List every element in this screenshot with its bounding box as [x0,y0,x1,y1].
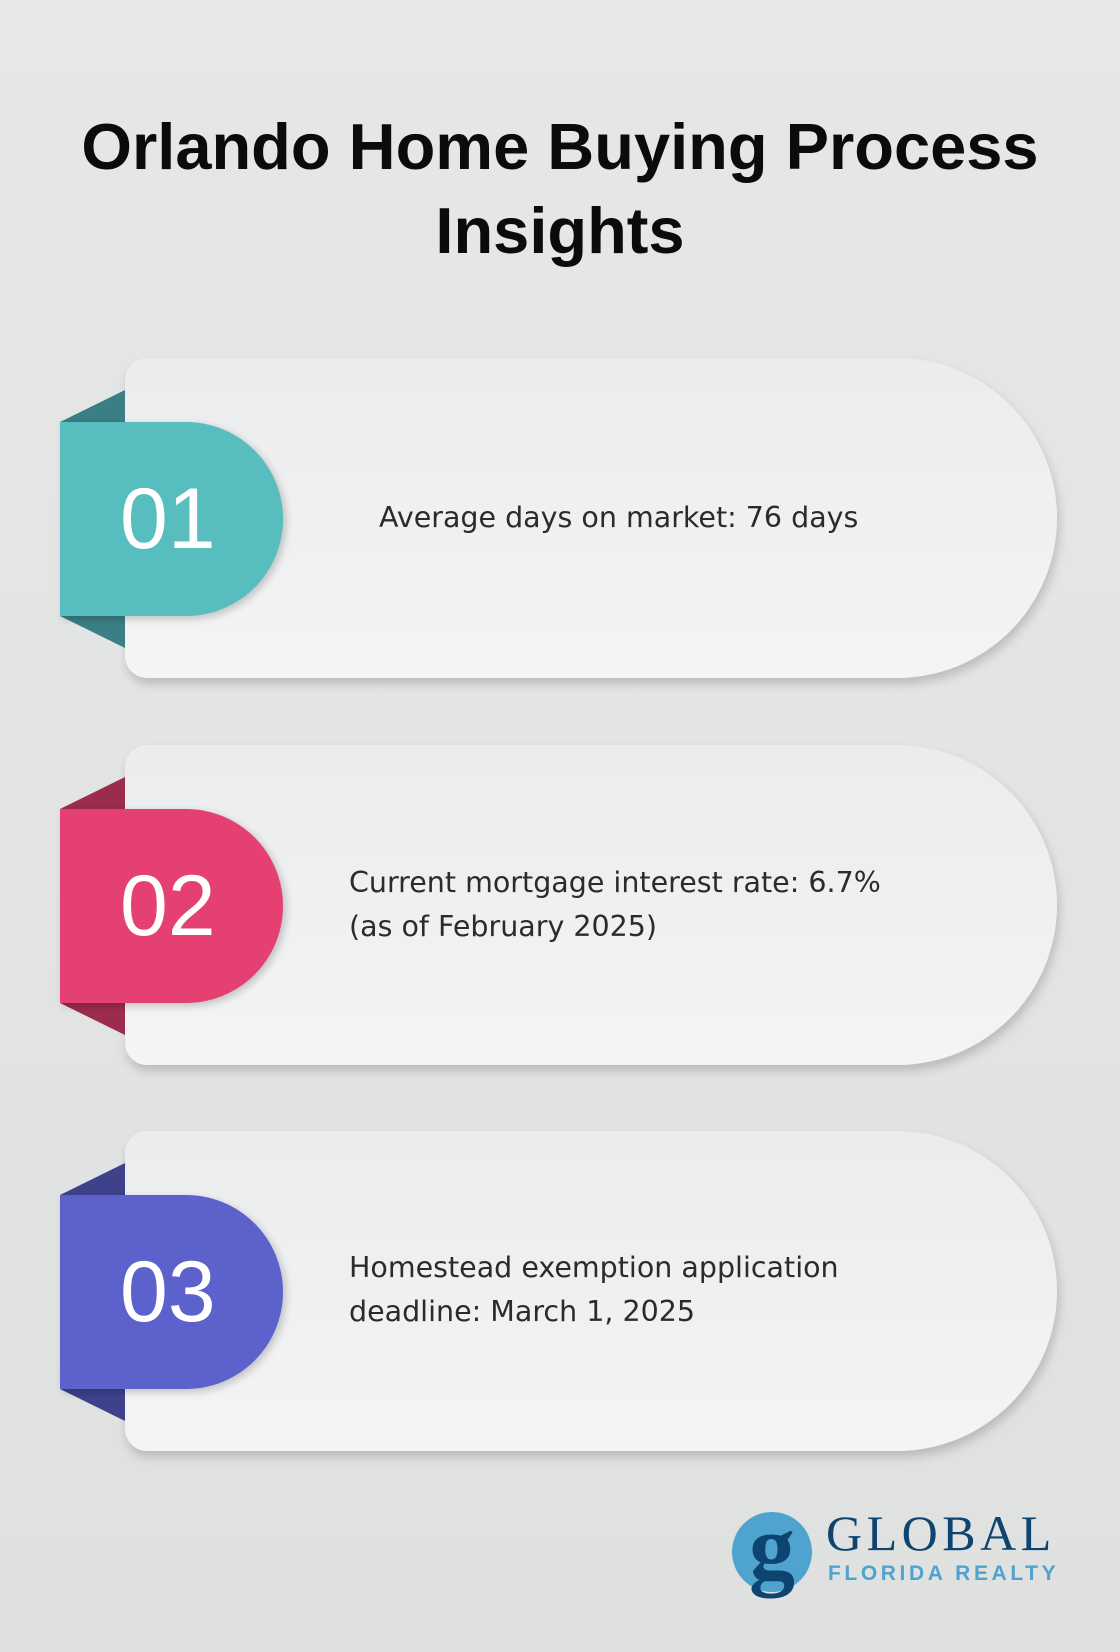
number tab: 01 [120,471,216,567]
panel: item 03 [60,1131,1063,1461]
number tab [60,422,283,616]
title [81,110,1039,267]
ribbon fold bottom [60,1003,125,1035]
text: Homestead exemption application [349,1251,839,1284]
logo wordmark: GLOBAL [826,1505,1056,1561]
text: Current mortgage interest rate: 6.7% [349,866,881,899]
text [349,1251,839,1328]
logo mark [732,1512,812,1592]
title: Insights [435,194,685,267]
card [125,1131,1057,1451]
ribbon fold top [60,390,125,422]
text: (as of February 2025) [349,910,657,943]
logo subtext: FLORIDA REALTY [828,1562,1059,1585]
logo mark: g [749,1496,795,1598]
ribbon fold bottom [60,1389,125,1421]
card [125,745,1057,1065]
title: Orlando Home Buying Process [81,110,1039,183]
card [125,358,1057,678]
text [349,866,881,943]
text: Average days on market: 76 days [379,501,858,534]
ribbon fold top [60,1163,125,1195]
ribbon fold top [60,777,125,809]
number tab [60,809,283,1003]
ribbon fold bottom [60,616,125,648]
number tab: 02 [120,858,216,954]
panel: item 02 [60,745,1063,1075]
number tab [60,1195,283,1389]
logo [732,1496,1059,1598]
text: deadline: March 1, 2025 [349,1295,695,1328]
panel: item 01 [60,370,1063,688]
number tab: 03 [120,1244,216,1340]
